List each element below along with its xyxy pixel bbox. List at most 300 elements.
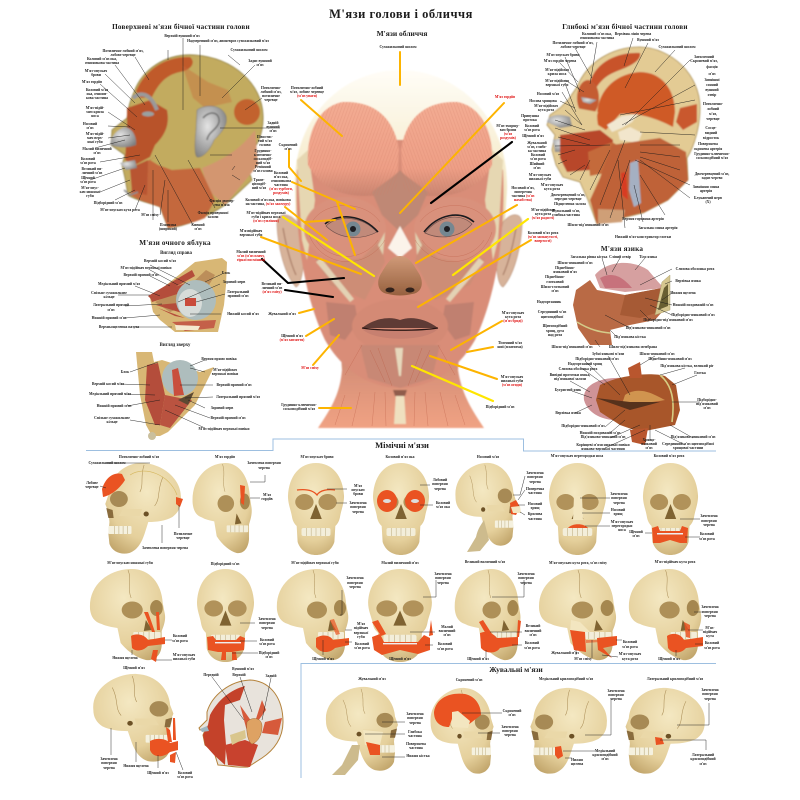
labels: deep muscles: Потилично- [703, 102, 724, 106]
labels: face muscles: Тіменний м'яз [498, 341, 523, 345]
labels: view from above: Верхня прямо повіка [201, 357, 237, 361]
labels: face muscles: поперечна [514, 190, 532, 194]
labels: superficial muscles: брови [91, 73, 102, 77]
labels: view from right: Спільне сухожилкове [91, 291, 127, 295]
labels: superficial muscles: Великий ви- [82, 167, 103, 171]
skull: buccinator: Щічний м'яз [147, 771, 169, 775]
skull: levator of the upper lip: черепа [349, 585, 361, 589]
skull: medial pterygoid [530, 677, 625, 774]
skull: depressor of the nasal septum: носа [618, 528, 626, 532]
labels: deep muscles: М'яз-опускач [541, 183, 563, 187]
labels: deep muscles: фасція [706, 65, 718, 69]
labels: tongue side view: Шило-під'язиковий м'яз [552, 345, 593, 349]
labels: deep muscles: глибока частина [552, 213, 580, 217]
skull: mentalis: Підборідний м'яз [211, 562, 240, 566]
skull: nasal: частина [528, 517, 542, 521]
labels: deep muscles: М'яз-підіймач [545, 68, 569, 72]
panel: eyeball muscles [89, 239, 261, 440]
skull: levator of the upper lip: Коловий [355, 642, 370, 646]
skull: depressor of the nasal septum: хрящ [613, 512, 623, 516]
pointer lines: orange [261, 52, 531, 408]
labels: superficial muscles: ний м'яз [256, 161, 271, 165]
labels: view from above: Медіальний прямий м'яз [89, 392, 132, 396]
skull: zygomaticus major: поверхня [518, 576, 534, 580]
labels: superficial muscles: м'яз [86, 126, 94, 130]
skull: depressor of the angle of the mouth: Жувальний м'яз [551, 651, 579, 655]
labels: face muscles: нижньої губи [501, 379, 524, 383]
skull: medial pterygoid: м'яз [601, 757, 609, 761]
labels: view from above [89, 357, 261, 431]
skull: orbicular of the eye: м'яз ока [436, 505, 450, 509]
labels: tongue side view: Шило-під'язикова мембрана [609, 345, 657, 349]
skull: zygomaticus minor: виличний [439, 629, 456, 633]
labels: deep muscles: протока [523, 118, 537, 122]
labels: superficial muscles: залози [208, 215, 219, 219]
skull: masseter: поверхня [407, 716, 423, 720]
labels: superficial muscles: м'яз рота [80, 161, 96, 165]
skull: medial pterygoid: поверхня [608, 693, 624, 697]
skull: nasal: поверхня [527, 475, 543, 479]
labels: superficial muscles: ньої губи [87, 140, 104, 144]
illustration: frontal face muscle anatomy [277, 70, 522, 428]
skull: depressor of the nasal septum: поверхня [611, 496, 627, 500]
skull: nasal: Зачеплена [526, 471, 544, 475]
labels: deep muscles: м'яз [708, 72, 716, 76]
labels: deep muscles: М'яз-опускач брови [546, 53, 580, 57]
labels: tongue from below [550, 352, 719, 451]
labels: deep muscles: черевце [706, 117, 720, 121]
skull: depressor of the nasal septum [549, 454, 633, 555]
labels: tongue from below: Корінцеві м'язи нижньої повіки [576, 443, 630, 447]
skull: zygomaticus major [455, 560, 542, 661]
labels: tongue from below: хрящової частини [673, 446, 704, 450]
labels: face muscles [236, 45, 559, 411]
labels: face muscles: Сухожилковий шолом [380, 45, 417, 49]
skull: depressor of the nasal septum: М'яз-опускач [611, 520, 633, 524]
skull: temporalis: Скроневий м'яз [456, 678, 483, 682]
skull: depressor of the eyebrow: опускач [351, 488, 365, 492]
skull: temporalis [431, 678, 522, 774]
skull: levator of the upper lip: Щічний м'яз [312, 657, 334, 661]
skull: medial pterygoid: крилоподібний [592, 753, 618, 757]
labels: tongue from below: під'язикової залози [554, 377, 587, 381]
labels: face muscles: М'яз-підіймач [531, 208, 555, 212]
skull: orbicular of the mouth: Коловий [700, 532, 715, 536]
skull: lateral pterygoid: м'яз [699, 762, 707, 766]
skull: medial pterygoid: щелепа [571, 762, 583, 766]
labels: face muscles: (м'яз радості) [532, 216, 555, 220]
labels: face muscles: Жувальний м'яз [268, 312, 296, 316]
skull: masseter: частина [408, 734, 422, 738]
skull: lateral pterygoid: черепа [704, 697, 716, 701]
skull: orbicular of the mouth: Зачеплена [700, 514, 718, 518]
skull: depressor of the angle of the mouth: М'яз сміху [574, 657, 592, 661]
skull: orbicular of the eye: Лобовий [433, 478, 448, 482]
labels: tongue side view: Піднебінно- [555, 266, 576, 270]
skull: occipitofrontalis: Зачеплена поверхня черепа [142, 546, 188, 550]
skull: depressor of the lower lip: Коловий [173, 634, 188, 638]
panel: mimic muscles row 2 [90, 560, 720, 662]
skull: orbicular of the eye [373, 455, 451, 555]
labels: superficial muscles: М'яз-опус- [81, 186, 100, 190]
labels: face muscles: роздумів) [273, 191, 290, 195]
labels: tongue from below: язиково-верхньої частини [581, 447, 626, 451]
labels: face muscles: Коловий [274, 171, 289, 175]
skull: procerus: черепа [258, 466, 270, 470]
labels: tongue side view: Під'язиково-язиковий м'яз [626, 326, 671, 330]
skull: levator of the angle of the mouth: підіймач [703, 630, 717, 634]
skull: occipitofrontalis: Потилично-лобний м'яз [119, 455, 160, 459]
labels: deep muscles: Верхівна лінія черепа [615, 32, 651, 36]
labels: deep muscles: Вушний м'яз [637, 38, 659, 42]
labels: superficial muscles: очноямкова частина [85, 61, 119, 65]
skull: depressor of the nasal septum: черепа [613, 501, 625, 505]
skull: nasal: частина [528, 491, 542, 495]
skull: lateral pterygoid: крилоподібний [690, 757, 716, 761]
labels: face muscles: М'язпідіймач [240, 229, 262, 233]
skull: buccinator: м'яз рота [177, 775, 193, 779]
labels: deep muscles: верхньої губи [546, 83, 569, 87]
skull: orbicular of the eye: Коловий м'яз ока [386, 455, 415, 459]
heading: superficial muscles: Поверхневі м'язи бічної частини голови [112, 22, 250, 31]
labels: view from right: Верхньощелепна пазуха [99, 325, 139, 329]
skull: depressor of the lower lip: М'яз-опускач нижньої губи [107, 561, 154, 565]
labels: tongue from below: Нижній поздовжній м'яз [580, 431, 621, 435]
illustration: head with auricular muscles: Передній [203, 673, 220, 677]
skull: masseter [326, 677, 430, 775]
labels: view from right: М'яз-підіймач верхньої повіки [120, 266, 172, 270]
labels: deep muscles: переднє черевце [554, 197, 582, 201]
labels: superficial muscles: вушний [266, 125, 280, 129]
skull: mentalis: м'яз рота [259, 642, 275, 646]
skull: depressor of the lower lip [90, 561, 196, 662]
labels: face muscles: (м'яз турботи, [269, 187, 293, 191]
skull: zygomaticus major: Великий [526, 624, 541, 628]
labels: deep muscles: крила носа [548, 72, 566, 76]
labels: tongue side view: Під'язикова кістка [614, 335, 646, 339]
panel: mimic muscles row 1 [85, 454, 718, 555]
skull: zygomaticus minor: Щічний м'яз [389, 657, 411, 661]
skull: orbicular of the mouth: Коловий м'яз рота [654, 454, 685, 458]
skull: orbicular of the mouth: м'яз [632, 534, 640, 538]
labels: tongue side view: Нижня щелепа [670, 291, 696, 295]
labels: view from right: Блок [222, 271, 231, 275]
labels: superficial muscles: М'яз-опускач [85, 69, 107, 73]
skull: levator of the upper lip: поверхня [347, 581, 363, 585]
labels: face muscles: очноямкова [271, 179, 291, 183]
labels: superficial muscles: носа [91, 114, 99, 118]
labels: superficial muscles: М'яз-опускач кута рота [100, 208, 140, 212]
skull: medial pterygoid: Зачеплена [607, 689, 625, 693]
labels: deep muscles: заднє черево [701, 176, 723, 180]
labels: deep muscles: Сухожилковий шолом [658, 45, 696, 49]
labels: face muscles: частина (м'яз [512, 194, 535, 198]
skull: nasal [455, 455, 544, 552]
labels: superficial muscles: Півостис- [257, 135, 274, 139]
labels: tongue side view: м'яз [551, 289, 559, 293]
labels: superficial muscles: цієподіб- [252, 182, 267, 186]
labels: face muscles: личний м'яз [262, 286, 283, 290]
skull: buccinator: Нижня щелепа [123, 764, 149, 768]
labels: superficial muscles: М'яз-підій- [86, 106, 105, 110]
labels: tongue side view: Піднебінно- [545, 275, 566, 279]
skull: masseter: черепа [409, 721, 421, 725]
skull: depressor of the eyebrow: М'яз-опускач брови [300, 455, 334, 459]
labels: face muscles: Скроневий [279, 143, 298, 147]
skull: procerus: М'яз [263, 493, 272, 497]
labels: superficial muscles: личний м'яз [82, 171, 103, 175]
skull: mentalis: поверхня [259, 621, 275, 625]
skull: temporalis: Скроневий [503, 709, 522, 713]
labels: deep muscles: Загальна сонна артерія [638, 226, 678, 230]
skull: lateral pterygoid: поверхня [702, 692, 718, 696]
labels: tongue side view: глотковий [546, 280, 564, 284]
skull: occipitofrontalis [85, 455, 193, 554]
labels: face muscles: (м'яз уваги) [297, 94, 318, 98]
skull: levator of the angle of the mouth: черепа [704, 614, 716, 618]
labels: view from above: Спільне сухожилкове [94, 416, 130, 420]
labels: tongue from below: Серединний м'яз щитоподібної [662, 442, 715, 446]
labels: tongue side view: Сліпий отвір [609, 255, 631, 259]
labels: superficial muscles: соскоподіб- [254, 157, 273, 161]
labels: deep muscles: Блукаючий нерв [694, 196, 722, 200]
skull: depressor of the lower lip: м'яз рота [172, 639, 188, 643]
skull: medial pterygoid: черепа [610, 697, 622, 701]
skull: depressor of the angle of the mouth: м'яз рота [622, 645, 638, 649]
labels: face muscles: (м'яз бриді) [503, 319, 523, 323]
labels: face muscles: м'яз ока, [274, 175, 288, 179]
skull: zygomaticus minor: Зачеплена [434, 572, 452, 576]
labels: tongue from below: Під'язиково-язиковий м'яз [671, 435, 716, 439]
labels: superficial muscles: ока, очноям- [86, 92, 108, 96]
labels: tongue from below: м'яз [703, 406, 711, 410]
heading: tongue muscles: М'язи язика [601, 245, 643, 253]
skull: lateral pterygoid [626, 677, 719, 774]
labels: face muscles: кута рота [535, 212, 551, 216]
skull: levator of the angle of the mouth: Зачеплена [701, 605, 719, 609]
labels: superficial muscles: потиличне [262, 94, 280, 98]
labels: tongue side view: Шило-язиковий м'яз [558, 261, 593, 265]
labels: deep muscles: Зовнішня сонна [693, 185, 719, 189]
labels: deep muscles: Коловий м'яз ока, [582, 32, 612, 36]
labels: tongue side view: Тіло язика [639, 255, 657, 259]
labels: tongue from below: Під'язиково-язиковий м'яз [581, 435, 626, 439]
skull: zygomaticus major: черепа [520, 581, 532, 585]
heading: auricular muscles: Вушний м'яз [232, 667, 254, 671]
pointer lines: black [262, 142, 512, 297]
labels: face muscles: М'яз сміху [301, 366, 319, 370]
labels: view from right: Нижній косий м'яз [227, 312, 259, 316]
illustration: deep head dissection [547, 38, 700, 228]
skull: mentalis: Коловий [260, 638, 275, 642]
labels: deep muscles: Носовий м'яз [537, 92, 560, 96]
heading: mimic muscles: Мімічні м'язи [375, 440, 429, 450]
skull: zygomaticus minor [368, 561, 456, 662]
skull: lateral pterygoid: Латеральний крилоподібний м'яз [647, 677, 704, 681]
skull: zygomaticus major: Зачеплена [517, 572, 535, 576]
skull: zygomaticus major: м'яз рота [524, 646, 540, 650]
skull: depressor of the nasal septum: Зачеплена [610, 492, 628, 496]
heading: masticatory muscles: Жувальні м'язи [489, 665, 543, 674]
heading: face muscles: М'язи обличчя [377, 29, 427, 38]
skull: nasal: черепа [529, 480, 541, 484]
labels: deep muscles: видний [705, 131, 718, 135]
labels: face muscles: М'яз-підіймач верхньої [246, 211, 286, 215]
labels: superficial muscles: лобний м'яз, [260, 90, 282, 94]
skull: levator of the upper lip: м'яз рота [354, 646, 370, 650]
skull: nasal: хрящ [530, 506, 540, 510]
labels: deep muscles: (X) [705, 200, 711, 204]
panel: tongue muscles [537, 245, 719, 451]
labels: tongue from below: Вивідні проточки язика, [550, 373, 590, 377]
skull: levator of the angle of the mouth: Щічний м'яз [658, 657, 680, 661]
labels: superficial muscles: Коловий [81, 157, 96, 161]
skull: orbicular of the mouth [629, 454, 718, 555]
labels: face muscles: Малий виличний [236, 250, 267, 254]
skull: procerus: Зачеплена поверхня [247, 461, 281, 465]
labels: face muscles: Коловий м'яз ока, повікова [245, 198, 291, 202]
labels: deep muscles: соскоподібний м'яз [696, 156, 728, 160]
labels: deep muscles: сонний [706, 83, 719, 87]
labels: deep muscles: Коловий [525, 124, 540, 128]
labels: face muscles: м'яз (м'яз плачу, [237, 254, 265, 258]
labels: superficial muscles: тий м'яз [258, 139, 273, 143]
labels: face muscles: соскоподібний м'яз [283, 407, 315, 411]
labels: view from right: Нижній прямий м'яз [92, 316, 127, 320]
labels: superficial muscles: ний м'яз [252, 186, 267, 190]
labels: superficial muscles: м'яз [269, 129, 277, 133]
labels: view from above: Верхній косий м'яз [92, 382, 124, 386]
labels: face muscles: нахабства) [514, 198, 533, 202]
heading: eyeball muscles: М'язи очного яблука [139, 239, 211, 247]
skull: medial pterygoid: Нижня [571, 758, 583, 762]
labels: deep muscles: Привушна [521, 114, 539, 118]
labels: tongue side view: Надгортанник [537, 300, 562, 304]
skull: depressor of the angle of the mouth [539, 561, 641, 661]
labels: superficial muscles: Носовий [83, 122, 98, 126]
labels: deep muscles: Коловий [531, 153, 546, 157]
labels: tongue from below: Глотка [694, 371, 706, 375]
labels: tongue side view: Шило-глотковий [541, 285, 570, 289]
skull: occipitofrontalis: черевце [85, 485, 99, 489]
labels: superficial muscles: Коловий м'яз ока, [87, 57, 117, 61]
skull: depressor of the eyebrow: М'яз [354, 484, 363, 488]
skull: buccinator [93, 666, 193, 779]
skull: levator of the upper lip: губи [357, 635, 366, 639]
labels: tongue from below: Підборідно-язиковий м'яз [561, 424, 605, 428]
labels: tongue side view: над рота [548, 333, 562, 337]
labels: tongue side view: Серединний м'яз [538, 310, 567, 314]
labels: tongue from below: Піднебінно-язиковий м'яз [648, 357, 692, 361]
panel: deep muscles of lateral head [521, 22, 730, 239]
labels: superficial muscles: Ремінний [255, 165, 272, 169]
skull: nasal: Поперечна [526, 487, 544, 491]
labels: view from right: кільце [104, 295, 115, 299]
illustration: superficial head dissection [90, 38, 280, 228]
panel: buccinator and epicranial muscles [93, 666, 283, 779]
skull: levator of the angle of the mouth: М'яз-підіймач кута рота [655, 560, 695, 564]
labels: superficial muscles: кач нижньої [80, 190, 101, 194]
labels: tongue side view [537, 255, 715, 349]
skull: depressor of the angle of the mouth: М'яз-опускач кута рота, м'яз сміху [549, 561, 607, 565]
labels: superficial muscles: М'яз-підій- [86, 132, 105, 136]
skull: masseter: Зачеплена [406, 712, 424, 716]
skull: depressor of the angle of the mouth: Коловий [623, 640, 638, 644]
labels: deep muscles: М'яз гордіїв черепа [544, 59, 576, 63]
labels: deep muscles: М'яз-опускач [529, 173, 551, 177]
labels: tongue from below: Підборідно-язиковий м'яз [575, 357, 619, 361]
labels: superficial muscles: ключично- [254, 153, 273, 157]
labels: superficial muscles: М'яз сміху [141, 213, 159, 217]
labels: face muscles: (м'яз завзяття) [280, 338, 305, 342]
labels: superficial muscles: Грудинно- [254, 149, 272, 153]
skull: levator of the upper lip: Зачеплена [346, 576, 364, 580]
skull: zygomaticus major: Щічний м'яз [467, 657, 489, 661]
labels: view from right: Латеральний [227, 290, 250, 294]
labels: tongue side view: Підборідно-під'язиковий м'яз [643, 318, 693, 322]
skull: mentalis: черепа [261, 626, 273, 630]
skull: depressor of the angle of the mouth: М'яз-опускач [619, 652, 641, 656]
labels: superficial muscles: кова частина [86, 96, 108, 100]
labels: tongue from below: Надгортанний хрящ [568, 362, 603, 366]
labels: face muscles: (м'яз замкнутості, [528, 235, 558, 239]
labels: face muscles: верхньої губи [240, 233, 263, 237]
labels: superficial muscles: Потилично-лобний м'яз, [102, 49, 144, 53]
labels: tongue from below: Підборідно- [697, 398, 718, 402]
labels: face muscles: М'яз-опускач [501, 375, 523, 379]
labels: face muscles: на частина, (м'яз зажмуру) [246, 202, 291, 206]
skull: lateral pterygoid: Латеральний [692, 753, 715, 757]
skull: levator of the upper lip: М'яз-підіймач верхньої губи [291, 561, 340, 565]
labels: deep muscles: Поверхнева [698, 142, 718, 146]
skull: occipitofrontalis: Сухожилковий шолом [88, 461, 126, 465]
labels: tongue side view: щитоподібної [541, 315, 564, 319]
skull: buccinator: Коловий [178, 771, 193, 775]
labels: deep muscles: м'яз, [709, 112, 717, 116]
labels: face muscles: Коловий м'яз рота [528, 231, 559, 235]
panel: central face muscles [236, 29, 559, 428]
illustration: head with auricular muscles [199, 667, 283, 767]
skull: procerus: гордіїв [261, 497, 273, 501]
skull: mentalis: Підборідний [259, 651, 280, 655]
labels: deep muscles: Шило-під'язиковий м'яз [568, 223, 609, 227]
labels: deep muscles: Потилично-лобний м'яз, [552, 41, 594, 45]
skull: occipitofrontalis: черевце [176, 536, 190, 540]
skull: mentalis [197, 562, 280, 662]
labels: tongue from below: Шило-язиковий м'яз [640, 352, 675, 356]
illustration: tongue from below [570, 356, 700, 448]
labels: deep muscles: кута рота [538, 108, 554, 112]
skull: mentalis: м'яз [265, 655, 273, 659]
title: М'язи голови і обличчя [329, 7, 473, 21]
skull: nasal: Носовий [528, 502, 543, 506]
labels: deep muscles: м'яз рота [530, 157, 546, 161]
labels: superficial muscles: М'яз гордіїв [82, 80, 102, 84]
labels: deep muscles: нижньої губи [529, 177, 552, 181]
labels: deep muscles: м'яз, глибо- [527, 145, 547, 149]
labels: face muscles: (м'яз сумління) [253, 219, 280, 223]
panel: masticatory muscles [326, 677, 719, 775]
skull: orbicular of the eye: черепа [434, 487, 446, 491]
labels: deep muscles: Двочеревцевий м'яз, [695, 172, 729, 176]
labels: deep muscles: кута рота [544, 187, 560, 191]
skull: temporalis: м'яз [508, 713, 516, 717]
labels: face muscles: Грудинно-ключично- [281, 403, 317, 407]
labels: view from above: Зоровий нерв [211, 406, 233, 410]
labels: view from above: Латеральний прямий м'яз [216, 395, 261, 399]
labels: superficial muscles: Трапе- [253, 178, 265, 182]
skull: levator of the upper lip: М'яз [357, 622, 366, 626]
